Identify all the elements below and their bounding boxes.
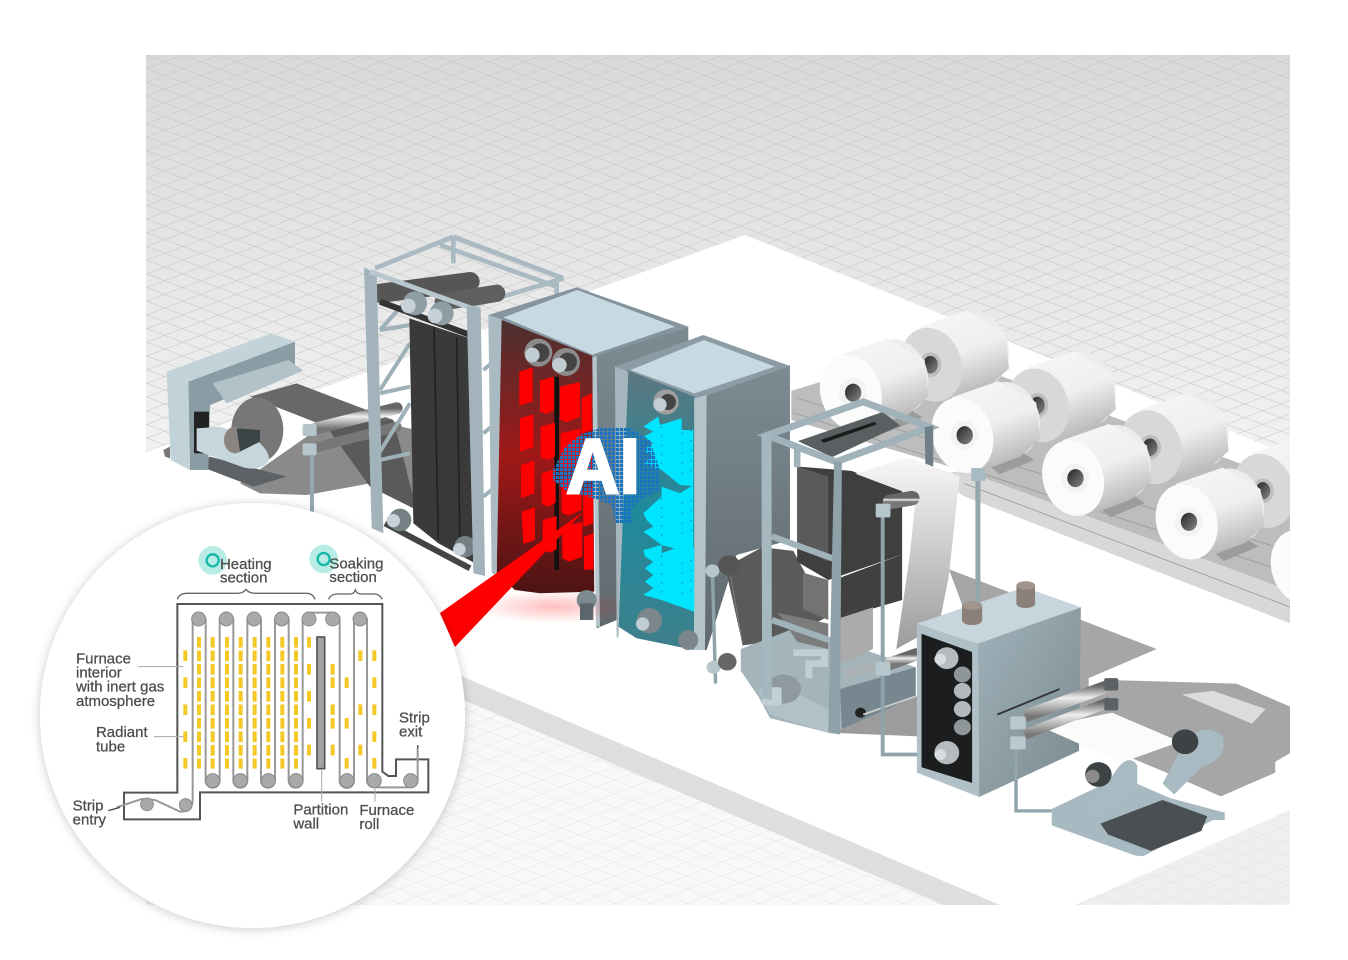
- lower dark box: [803, 573, 828, 620]
- housing top: [167, 333, 295, 382]
- dark sheets: [409, 318, 475, 563]
- side wall: [592, 327, 688, 628]
- strip rollers and rod: [890, 498, 912, 502]
- diagram labels: roll: [359, 816, 379, 833]
- coil: [231, 397, 283, 463]
- top bolt: [653, 389, 679, 415]
- diagram labels: with inert gas: [75, 679, 164, 696]
- top bolts: [524, 339, 552, 367]
- leader lines: [138, 667, 375, 802]
- connector rod: [971, 475, 984, 602]
- diagram labels: [73, 555, 430, 833]
- diagram labels: Strip: [73, 797, 103, 814]
- white factory platform: [146, 235, 1290, 905]
- coil front row 4: [1147, 462, 1272, 566]
- dark strip left of tower: [725, 547, 828, 645]
- arms: [1085, 760, 1137, 820]
- soaking marker: [309, 545, 338, 573]
- lower-left floor grid area: [146, 543, 1000, 905]
- icon: pixel brain: [553, 428, 660, 523]
- inset diagram circle: [40, 503, 465, 928]
- tension stand, rollers and exit equipment: [705, 402, 1225, 856]
- coil back row 2: [999, 346, 1124, 449]
- housing front: [167, 372, 190, 470]
- strip arrows: [108, 745, 418, 811]
- frame top rectangle: [767, 402, 930, 462]
- stand front: [917, 624, 979, 797]
- diagram labels: section: [329, 569, 377, 586]
- left wall: [488, 315, 502, 575]
- coil back row 4: [1225, 431, 1348, 534]
- panel: exit stand: [917, 581, 1081, 797]
- top: [488, 287, 688, 357]
- centre strip: [550, 377, 564, 570]
- cap 1: [962, 615, 982, 625]
- stand opening: [922, 634, 972, 783]
- bottom bolts: [637, 608, 662, 633]
- furnace rolls: [141, 612, 418, 811]
- frame bars: [772, 445, 834, 642]
- rewinder base: [1052, 776, 1225, 856]
- diagram labels: Heating: [220, 556, 272, 573]
- diagram labels: section: [220, 570, 267, 587]
- AI logo: [553, 422, 660, 523]
- strip path: [117, 613, 418, 812]
- bottom rollers: [385, 523, 470, 568]
- diagram labels: interior: [76, 664, 122, 681]
- strip sheet: [855, 457, 960, 649]
- uncoiler machine: [167, 333, 417, 512]
- base plate: [197, 457, 287, 487]
- tower frame and furnaces: [364, 237, 790, 650]
- diagram labels: atmosphere: [76, 693, 155, 710]
- nip rollers: [1025, 685, 1110, 716]
- arm: [197, 427, 269, 469]
- floor shadows: [770, 569, 1300, 796]
- AI lettering: AI: [566, 422, 640, 510]
- coil back row 3: [1112, 388, 1237, 490]
- radiant tubes: [185, 637, 374, 769]
- diagram labels: Strip: [399, 710, 430, 727]
- front-left post: [364, 267, 383, 533]
- front-right post: [467, 306, 485, 576]
- panel: rewinder: [1010, 678, 1225, 856]
- furnace outline: [124, 604, 428, 819]
- back frame bars: [375, 237, 563, 306]
- top rollers: [380, 282, 470, 293]
- machine bed: [741, 627, 916, 733]
- coil front row 1: [812, 333, 937, 437]
- interior: [497, 319, 594, 593]
- cyan heater fins: [643, 417, 694, 612]
- coil front row 2: [923, 376, 1048, 479]
- cap 2: [1016, 599, 1035, 608]
- diagram labels: entry: [73, 812, 106, 829]
- furnace schematic: [73, 545, 430, 833]
- conveyor deck: [791, 365, 1300, 595]
- lower bolts: [577, 590, 597, 610]
- diagram labels: Radiant: [96, 724, 148, 741]
- top bin: [798, 412, 900, 457]
- shelf: [213, 360, 303, 403]
- top: [615, 335, 790, 400]
- stand slot: [997, 689, 1060, 715]
- red callout wedge: [440, 512, 583, 647]
- housing side: [188, 342, 295, 470]
- coil front row 3: [1034, 419, 1159, 522]
- upper dark box: [797, 467, 902, 580]
- diagram labels: Soaking: [329, 555, 383, 572]
- soaking brace: [329, 590, 382, 599]
- sheet from coil: [250, 383, 407, 487]
- frame posts: [761, 434, 772, 700]
- heating marker: [198, 546, 227, 575]
- tower grey filler: [834, 607, 873, 667]
- stand top: [917, 587, 1081, 644]
- diagram labels: Furnace: [359, 802, 414, 819]
- diagram labels: tube: [96, 738, 125, 755]
- top bars: [370, 272, 472, 308]
- coil back row 1: [892, 305, 1017, 408]
- diagram labels: wall: [292, 816, 319, 833]
- side wall: [694, 365, 790, 650]
- exit sheet: [1042, 713, 1180, 762]
- left tensioner rods: [712, 571, 716, 684]
- platform front edge band: [440, 667, 1000, 905]
- truss: [380, 297, 492, 497]
- coil front row 5: [1262, 508, 1348, 611]
- diagram labels: exit: [399, 724, 423, 741]
- lower-right floor grid area: [1075, 810, 1290, 905]
- heating brace: [177, 589, 315, 599]
- front rollers: [317, 408, 397, 428]
- heater glow: [473, 590, 633, 623]
- panel: heating furnace: [473, 287, 688, 628]
- red heater blocks: [519, 368, 594, 570]
- diagram labels: Partition: [293, 801, 348, 818]
- panel: soaking furnace: [615, 335, 790, 650]
- stand right face: [978, 607, 1081, 797]
- stand rollers: [935, 647, 958, 669]
- background floor with isometric grid: [146, 55, 1290, 905]
- conveyor with finished coils: [791, 305, 1348, 627]
- left wall: [615, 367, 628, 638]
- panel: tower frame: [364, 237, 563, 576]
- interior: [618, 370, 694, 650]
- partition wall: [317, 637, 325, 769]
- diagram labels: Furnace: [76, 650, 131, 667]
